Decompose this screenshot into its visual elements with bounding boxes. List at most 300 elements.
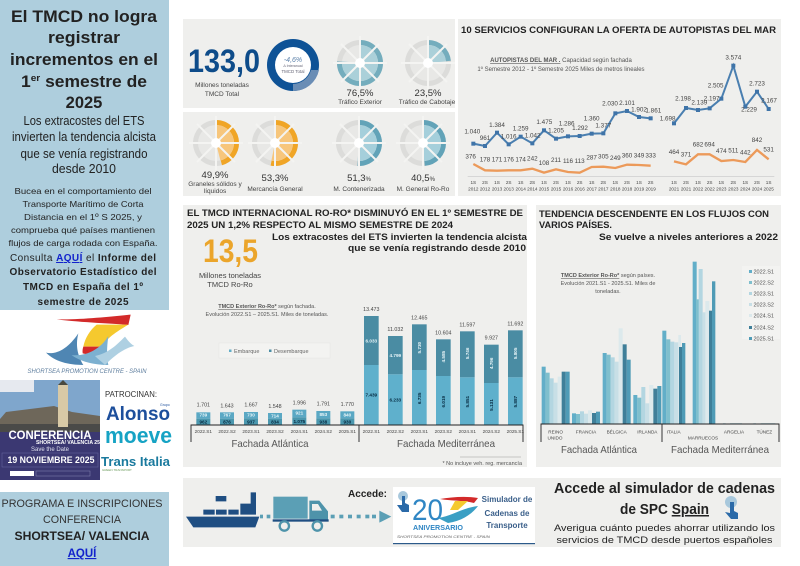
- panel: cargo types: [183, 112, 455, 196]
- simulator label: Simulador de: [482, 495, 533, 504]
- bar chart: Fachada Atlántica: 2023.S2: [266, 429, 284, 434]
- donut: [267, 39, 319, 91]
- anniversary mark: 20: [412, 494, 443, 527]
- line chart: 2025: [763, 186, 774, 191]
- bar chart: Fachada Mediterránea: 2022.S1: [363, 429, 380, 434]
- line chart: 113: [575, 158, 585, 165]
- title: er: [31, 73, 41, 84]
- line chart: 2023: [716, 186, 727, 191]
- intro text: flujos de carga rodada con España.: [8, 238, 158, 248]
- line chart: 1S: [470, 180, 476, 185]
- line chart: 2.229: [741, 106, 757, 113]
- heading: [187, 207, 528, 254]
- legend: 2025.S1: [754, 336, 774, 342]
- country labels: ITALIA: [667, 429, 682, 434]
- panel: conference banner: [0, 380, 100, 480]
- title: [10, 8, 158, 112]
- line chart: 171: [492, 157, 503, 164]
- chart note: [561, 273, 656, 295]
- line chart: 2015: [551, 186, 562, 191]
- pie: general ro-ro: M. General Ro-Ro: [397, 186, 450, 193]
- intro text: semestre de 2025: [38, 297, 129, 308]
- line chart: 3.574: [725, 54, 742, 61]
- title: 2025: [66, 94, 102, 112]
- simulator label: [482, 495, 533, 530]
- sponsors: Alonso: [106, 404, 170, 425]
- intro text: Bucea en el comportamiento del: [14, 186, 152, 196]
- sponsors: PATROCINAN:: [105, 390, 157, 399]
- bar chart: Fachada Atlántica: 1.701: [197, 403, 210, 409]
- panel: conference programme: PROGRAMA E INSCRIPCIONES: [2, 498, 162, 510]
- bar chart: Fachada Mediterránea: 11.032: [387, 327, 403, 333]
- intro text: Consulta AQUÍ el Informe del: [10, 251, 156, 264]
- bars: Reino Unido: [542, 367, 570, 424]
- bar chart: Fachada Atlántica: 938: [319, 419, 328, 424]
- line chart: 2S: [683, 180, 689, 185]
- line chart: 1.698: [660, 116, 676, 123]
- bar chart: Fachada Atlántica: 962: [199, 419, 208, 424]
- legend: [219, 343, 330, 358]
- simulator label: Cadenas de: [485, 509, 530, 518]
- pie: tráfico de cabotaje: Tráfico de Cabotaje: [399, 99, 456, 106]
- line chart: 2015: [539, 186, 550, 191]
- bar chart: Fachada Atlántica: 2022.S2: [218, 429, 236, 434]
- simulator card: [393, 487, 535, 544]
- bar chart: Fachada Mediterránea: 4.796: [489, 357, 494, 369]
- subtitle: [12, 114, 156, 176]
- line chart: 1S: [695, 180, 701, 185]
- bar chart: Fachada Atlántica: 930: [343, 419, 352, 424]
- intro text: Transporte Marítimo de Corta: [22, 199, 144, 209]
- bars: Italia: [662, 331, 685, 424]
- country labels: BÉLGICA: [607, 428, 628, 434]
- chart note: [206, 304, 329, 318]
- panel: simulator banner: [183, 478, 781, 547]
- bar chart: Fachada Atlántica: 2024.S2: [315, 429, 332, 434]
- line chart: [464, 54, 777, 191]
- line chart: 2012: [468, 186, 479, 191]
- bar chart: Fachada Atlántica: 767: [223, 413, 231, 418]
- bar chart: countries: [542, 262, 775, 441]
- pie: tráfico exterior: 76,5%: [347, 88, 374, 99]
- bar chart: Fachada Atlántica: 937: [247, 419, 255, 424]
- chart note: [477, 58, 645, 73]
- bars: Bélgica: [603, 328, 631, 424]
- panel: TMCD internacional Ro-Ro: [183, 205, 528, 467]
- bar chart: Fachada Mediterránea: 4.585: [441, 350, 446, 362]
- panel: conference banner: SHORTSEA/ VALENCIA 25: [36, 440, 100, 446]
- subtitle: desde 2010: [52, 162, 116, 176]
- pie: mercancía general: [247, 116, 303, 193]
- call to action heading: de SPC Spain: [620, 501, 709, 518]
- heading: TENDENCIA DESCENDENTE EN LOS FLUJOS CON: [539, 209, 769, 220]
- line chart: 531: [763, 147, 774, 154]
- bar chart: Fachada Atlántica: 853: [319, 412, 328, 417]
- panel: conference programme: [0, 492, 169, 566]
- panel: autopistas del mar: [458, 19, 781, 196]
- bar chart: Fachada Mediterránea: 5.730: [417, 341, 422, 353]
- bar chart: Fachada Atlántica: 1.791: [317, 402, 330, 408]
- title: 1: [21, 73, 30, 91]
- line chart: 287: [586, 154, 597, 161]
- legend: Desembarque: [274, 349, 309, 355]
- line chart: 2S: [506, 180, 512, 185]
- bar chart: Fachada Mediterránea: 9.927: [485, 336, 498, 342]
- heading: Los extracostes del ETS invierten la tendencia alcista: [272, 232, 528, 243]
- legend: 2023.S2: [754, 302, 774, 308]
- line chart: 2016: [563, 186, 574, 191]
- subtitle: que se venía registrando: [20, 147, 148, 161]
- bar chart: Fachada Mediterránea: 2023.S1: [411, 429, 428, 434]
- line chart: 333: [645, 153, 656, 160]
- bars: Marruecos: [693, 262, 715, 424]
- caption: Millones toneladas: [199, 271, 261, 280]
- bar chart: Fachada Mediterránea: 5.887: [513, 395, 518, 407]
- line chart: 1.040: [464, 128, 481, 135]
- bar chart: Fachada Atlántica: 2024.S1: [291, 429, 308, 434]
- line chart: 116: [563, 158, 574, 165]
- heading: [539, 209, 778, 243]
- panel: left headline: [0, 0, 169, 310]
- line chart: 2012: [480, 186, 491, 191]
- pie: tráfico exterior: [333, 36, 387, 106]
- subtitle: Los extracostes del ETS: [24, 114, 144, 128]
- pie: graneles: Graneles sólidos y: [188, 181, 242, 188]
- axis label: Mediterránea: Fachada Mediterránea: [397, 438, 495, 450]
- subtitle: invierten la tendencia alcista: [12, 130, 156, 144]
- line chart: 1.016: [501, 133, 517, 140]
- icon: pointer: [397, 491, 409, 512]
- bar chart: Fachada Mediterránea: 2023.S2: [435, 429, 452, 434]
- intro text: Distancia en el 1º S 2025, y: [24, 212, 143, 222]
- caption: TMCD Total: [205, 91, 240, 98]
- sponsors: Trans Italia: [101, 454, 171, 469]
- sponsors: [101, 390, 172, 472]
- country labels: UNIDO: [547, 436, 563, 441]
- line chart: 961: [480, 135, 491, 142]
- line chart: 2017: [586, 186, 597, 191]
- line chart: 1.475: [536, 119, 553, 126]
- call to action text: [554, 523, 775, 546]
- chart note: TMCD Exterior Ro-Ro* según fachada.: [218, 304, 316, 310]
- line chart: 1.292: [572, 125, 588, 132]
- panel: conference programme: CONFERENCIA: [43, 514, 122, 526]
- bar chart: Fachada Mediterránea: 2022.S2: [387, 429, 404, 434]
- line chart: 2018: [622, 186, 633, 191]
- bar chart: Fachada Mediterránea: 5.746: [465, 347, 470, 359]
- line chart: 1S: [518, 180, 524, 185]
- line chart: 842: [752, 137, 763, 144]
- intro text: comprueba qué países mantienen: [11, 225, 155, 235]
- icon: pointer: [725, 496, 738, 519]
- line chart: 2017: [598, 186, 609, 191]
- axis label: Mediterránea: Fachada Mediterránea: [671, 444, 769, 456]
- icon: ship: [186, 492, 259, 527]
- line chart: 2023: [728, 186, 739, 191]
- title: El TMCD no logra: [11, 8, 158, 26]
- line chart: 305: [598, 154, 609, 161]
- pie: mercancía general: Mercancía General: [247, 186, 303, 193]
- sponsors: GREEN TRANSPORT: [102, 468, 132, 472]
- bar chart: Fachada Atlántica: 1.770: [341, 402, 354, 408]
- line chart: 2016: [574, 186, 585, 191]
- heading: que se venía registrando desde 2010: [348, 243, 526, 254]
- country labels: ARGELIA: [724, 429, 745, 434]
- line chart: 2S: [600, 180, 606, 185]
- panel: conference banner: Save the Date: [31, 447, 70, 453]
- line chart: 249: [610, 155, 621, 162]
- pie: graneles: líquidos: [204, 188, 227, 195]
- bar chart: Fachada Mediterránea: 2024.S1: [459, 429, 476, 434]
- line chart: 2S: [648, 180, 654, 185]
- heading: 2025 UN 1,2% RESPECTO AL MISMO SEMESTRE DE 2024: [187, 220, 454, 231]
- line chart: 1.360: [584, 115, 600, 122]
- anniversary mark: ANIVERSARIO: [413, 525, 464, 532]
- pie: contenerizada: M. Contenerizada: [333, 186, 385, 193]
- line chart: 371: [681, 151, 692, 158]
- legend: Embarque: [234, 349, 259, 355]
- bars: Irlanda: [633, 385, 661, 424]
- panel: conference programme: AQUÍ: [68, 547, 97, 560]
- bar chart: Fachada Mediterránea: 2024.S2: [483, 429, 500, 434]
- country labels: IRLANDA: [637, 429, 658, 434]
- line chart: 2024: [752, 186, 763, 191]
- line chart: 1.286: [559, 121, 575, 128]
- line chart: 2019: [645, 186, 656, 191]
- line chart: 1S: [565, 180, 571, 185]
- line chart: 2.030: [602, 101, 618, 108]
- line chart: 2.723: [749, 80, 765, 87]
- intro text: [8, 186, 158, 308]
- line chart: 2.505: [708, 82, 724, 89]
- bar chart: Fachada Mediterránea: 4.799: [390, 353, 402, 358]
- line chart: 2S: [754, 180, 760, 185]
- line chart: 1S: [742, 180, 748, 185]
- line chart: 2.197: [704, 95, 720, 102]
- line chart: 694: [704, 142, 715, 149]
- logo: Shortsea Promotion Centre: SHORTSEA PROMOTION CENTRE - SPAIN: [28, 369, 147, 375]
- line chart: 2.139: [691, 99, 708, 106]
- legend: 2024.S1: [754, 314, 774, 320]
- line chart: 1S: [589, 180, 595, 185]
- line chart: 2014: [515, 186, 526, 191]
- bar chart: Fachada Atlántica: 714: [271, 413, 279, 418]
- title: semestre de: [40, 73, 147, 91]
- bar chart: Fachada Mediterránea: 5.131: [489, 399, 494, 411]
- caption: Millones toneladas: [195, 82, 250, 89]
- panel: conference banner: CONFERENCIA: [8, 428, 92, 442]
- line chart: 2013: [503, 186, 514, 191]
- line chart: 2021: [669, 186, 680, 191]
- country labels: MARRUECOS: [688, 436, 718, 441]
- line chart: 1S: [766, 180, 772, 185]
- intro text: TMCD en España del 1º: [23, 282, 143, 293]
- bar chart: Fachada Atlántica: 2023.S1: [242, 429, 260, 434]
- logo: Shortsea Promotion Centre: [28, 315, 147, 375]
- line chart: 211: [551, 157, 562, 164]
- line chart: 2S: [577, 180, 583, 185]
- line chart: 178: [480, 157, 491, 164]
- bar chart: Fachada Atlántica: 840: [343, 412, 352, 417]
- panel: TMCD total: [183, 19, 455, 108]
- line chart: 442: [740, 149, 751, 156]
- line chart: 349: [634, 153, 645, 160]
- line chart: 2019: [634, 186, 645, 191]
- footnote: * No incluye veh. reg. mercancía: [443, 461, 523, 467]
- heading: VARIOS PAÍSES.: [539, 220, 612, 231]
- panel: conference banner: 19 NOVIEMBRE 2025: [8, 455, 94, 465]
- call to action heading: Accede al simulador de cadenas: [554, 480, 775, 497]
- label: accede: Accede:: [348, 489, 387, 500]
- legend: [742, 266, 780, 342]
- bar chart: Fachada Mediterránea: 6.735: [417, 392, 422, 404]
- bar chart: Fachada Mediterránea: 11.597: [459, 322, 475, 328]
- anniversary mark: SHORTSEA PROMOTION CENTRE - SPAIN: [397, 535, 490, 539]
- axis label: Atlántica: Fachada Atlántica: [232, 438, 309, 450]
- line chart: 2022: [704, 186, 715, 191]
- intro text: Observatorio Estadístico del: [10, 267, 157, 278]
- bar chart: Fachada Atlántica: 739: [199, 413, 208, 418]
- donut: Δ Interanual: [283, 64, 303, 68]
- line chart: 1S: [718, 180, 724, 185]
- bars: Francia: [572, 410, 600, 424]
- chart note: 1º Semestre 2012 - 1º Semestre 2025 Miles de metros lineales: [477, 66, 645, 73]
- icon: truck: [273, 497, 329, 531]
- line chart: 2S: [482, 180, 488, 185]
- sponsors: Grupo: [160, 403, 170, 407]
- bar chart: Fachada Atlántica: 1.548: [268, 404, 282, 410]
- line chart: 2013: [492, 186, 503, 191]
- bar chart: Fachada Mediterránea: 10.604: [435, 330, 452, 336]
- line chart: 1.902: [631, 106, 647, 113]
- line chart: 376: [465, 154, 476, 161]
- line chart: 1.861: [645, 107, 662, 114]
- heading: Se vuelve a niveles anteriores a 2022: [599, 232, 778, 243]
- bar chart: Fachada Mediterránea: 5.805: [513, 347, 518, 359]
- pie: contenerizada: 51,3%: [347, 173, 372, 184]
- chart note: toneladas.: [595, 289, 621, 295]
- bar chart: Fachada Atlántica: 2022.S1: [195, 429, 212, 434]
- line chart: 2022: [693, 186, 704, 191]
- bar chart: Fachada Mediterránea: 2025.S1: [507, 429, 524, 434]
- legend: 2022.S1: [754, 270, 774, 276]
- bars: Argelia and Túnez: [723, 423, 775, 424]
- line chart: 2S: [730, 180, 736, 185]
- line chart: 1S: [494, 180, 500, 185]
- line chart: 2.101: [619, 100, 635, 107]
- bar chart: Fachada Atlántica: 1.075: [294, 419, 306, 424]
- call to action heading: [554, 480, 775, 518]
- pie: general ro-ro: 40,5%: [411, 173, 436, 184]
- legend: 2023.S1: [754, 292, 774, 298]
- line chart: 2.167: [761, 98, 777, 105]
- line chart: 2024: [740, 186, 751, 191]
- line chart: 2S: [707, 180, 713, 185]
- pie: graneles: 49,9%: [202, 170, 229, 181]
- line chart: 1S: [612, 180, 618, 185]
- heading: 10 SERVICIOS CONFIGURAN LA OFERTA DE AUTOPISTAS DEL MAR: [461, 25, 776, 36]
- simulator label: Transporte: [486, 521, 528, 530]
- pie: contenerizada: [332, 116, 386, 193]
- bar chart: Fachada Mediterránea: 12.465: [411, 315, 428, 321]
- line chart: 1.042: [525, 133, 541, 140]
- line chart: 1.259: [513, 126, 529, 133]
- line chart: 360: [622, 153, 633, 160]
- anniversary mark: [397, 494, 490, 539]
- bar chart: Fachada Atlántica: 2025.S1: [339, 429, 356, 434]
- bar chart: Fachada Mediterránea: 6.033: [366, 338, 378, 343]
- donut: -4,6%: [284, 57, 302, 64]
- chart note: Evolución 2021.S1 - 2025.S1. Miles de: [561, 281, 655, 287]
- bar chart: Fachada Atlántica: 1.667: [244, 403, 258, 409]
- line chart: 1S: [671, 180, 677, 185]
- call to action text: servicios de TMCD desde puertos españoles: [556, 535, 773, 546]
- line chart: 1S: [541, 180, 547, 185]
- arrow: dotted route: [260, 511, 391, 523]
- line chart: 2021: [681, 186, 692, 191]
- pie: mercancía general: 53,3%: [262, 173, 289, 184]
- bar chart: Fachada Mediterránea: [363, 307, 524, 434]
- chart note: AUTOPISTAS DEL MAR . Capacidad según fachada: [490, 58, 633, 64]
- line chart: 1.205: [548, 127, 564, 134]
- bar chart: Fachada Mediterránea: 5.851: [465, 395, 470, 407]
- line chart: 242: [527, 156, 538, 163]
- line chart: 174: [515, 157, 526, 164]
- country labels: FRANCIA: [576, 429, 597, 434]
- line chart: 474: [716, 148, 727, 155]
- line chart: 682: [693, 142, 704, 149]
- bar chart: Fachada Mediterránea: 13.473: [363, 307, 380, 313]
- big number: 13,5: [203, 233, 258, 269]
- title: registrar: [48, 29, 121, 47]
- bar chart: Fachada Mediterránea: 7.439: [366, 392, 378, 397]
- line chart: 1S: [636, 180, 642, 185]
- bar chart: Fachada Mediterránea: 6.019: [441, 395, 446, 407]
- line chart: 2S: [529, 180, 535, 185]
- panel: flujos por países: [536, 205, 781, 467]
- legend: 2022.S2: [754, 280, 774, 286]
- donut: TMCD Total: [281, 69, 305, 74]
- pie: tráfico de cabotaje: 23,5%: [415, 88, 442, 99]
- line chart: 2014: [527, 186, 538, 191]
- chart note: Evolución 2022.S1 – 2025.S1. Miles de toneladas.: [206, 312, 329, 318]
- country labels: REINO: [548, 429, 563, 434]
- panel: conference programme: SHORTSEA/ VALENCIA: [14, 531, 150, 543]
- bar chart: Fachada Atlántica: [195, 400, 356, 434]
- caption: TMCD Ro-Ro: [207, 280, 253, 289]
- line chart: 176: [503, 157, 514, 164]
- line chart: 108: [539, 160, 550, 167]
- bar chart: Fachada Atlántica: 730: [247, 412, 255, 417]
- pie: general ro-ro: [396, 116, 450, 193]
- call to action text: Averigua cuánto puedes ahorrar utilizando los: [554, 523, 775, 534]
- sponsors: moeve: [105, 423, 172, 448]
- line chart: 1.377: [595, 123, 612, 130]
- line chart: 1.384: [489, 122, 505, 129]
- big number: 133,0: [188, 43, 260, 79]
- line chart: 511: [728, 147, 739, 154]
- pie: tráfico exterior: Tráfico Exterior: [338, 99, 383, 106]
- axis label: Atlántica: Fachada Atlántica: [561, 444, 637, 456]
- bar chart: Fachada Atlántica: 921: [295, 411, 304, 416]
- bar chart: Fachada Atlántica: 876: [223, 419, 231, 424]
- footnote: [443, 457, 523, 467]
- caption: [199, 271, 261, 289]
- line chart: 2018: [610, 186, 621, 191]
- bar chart: Fachada Mediterránea: 11.692: [507, 321, 523, 327]
- country labels: TÚNEZ: [757, 428, 772, 434]
- line chart: 2S: [553, 180, 559, 185]
